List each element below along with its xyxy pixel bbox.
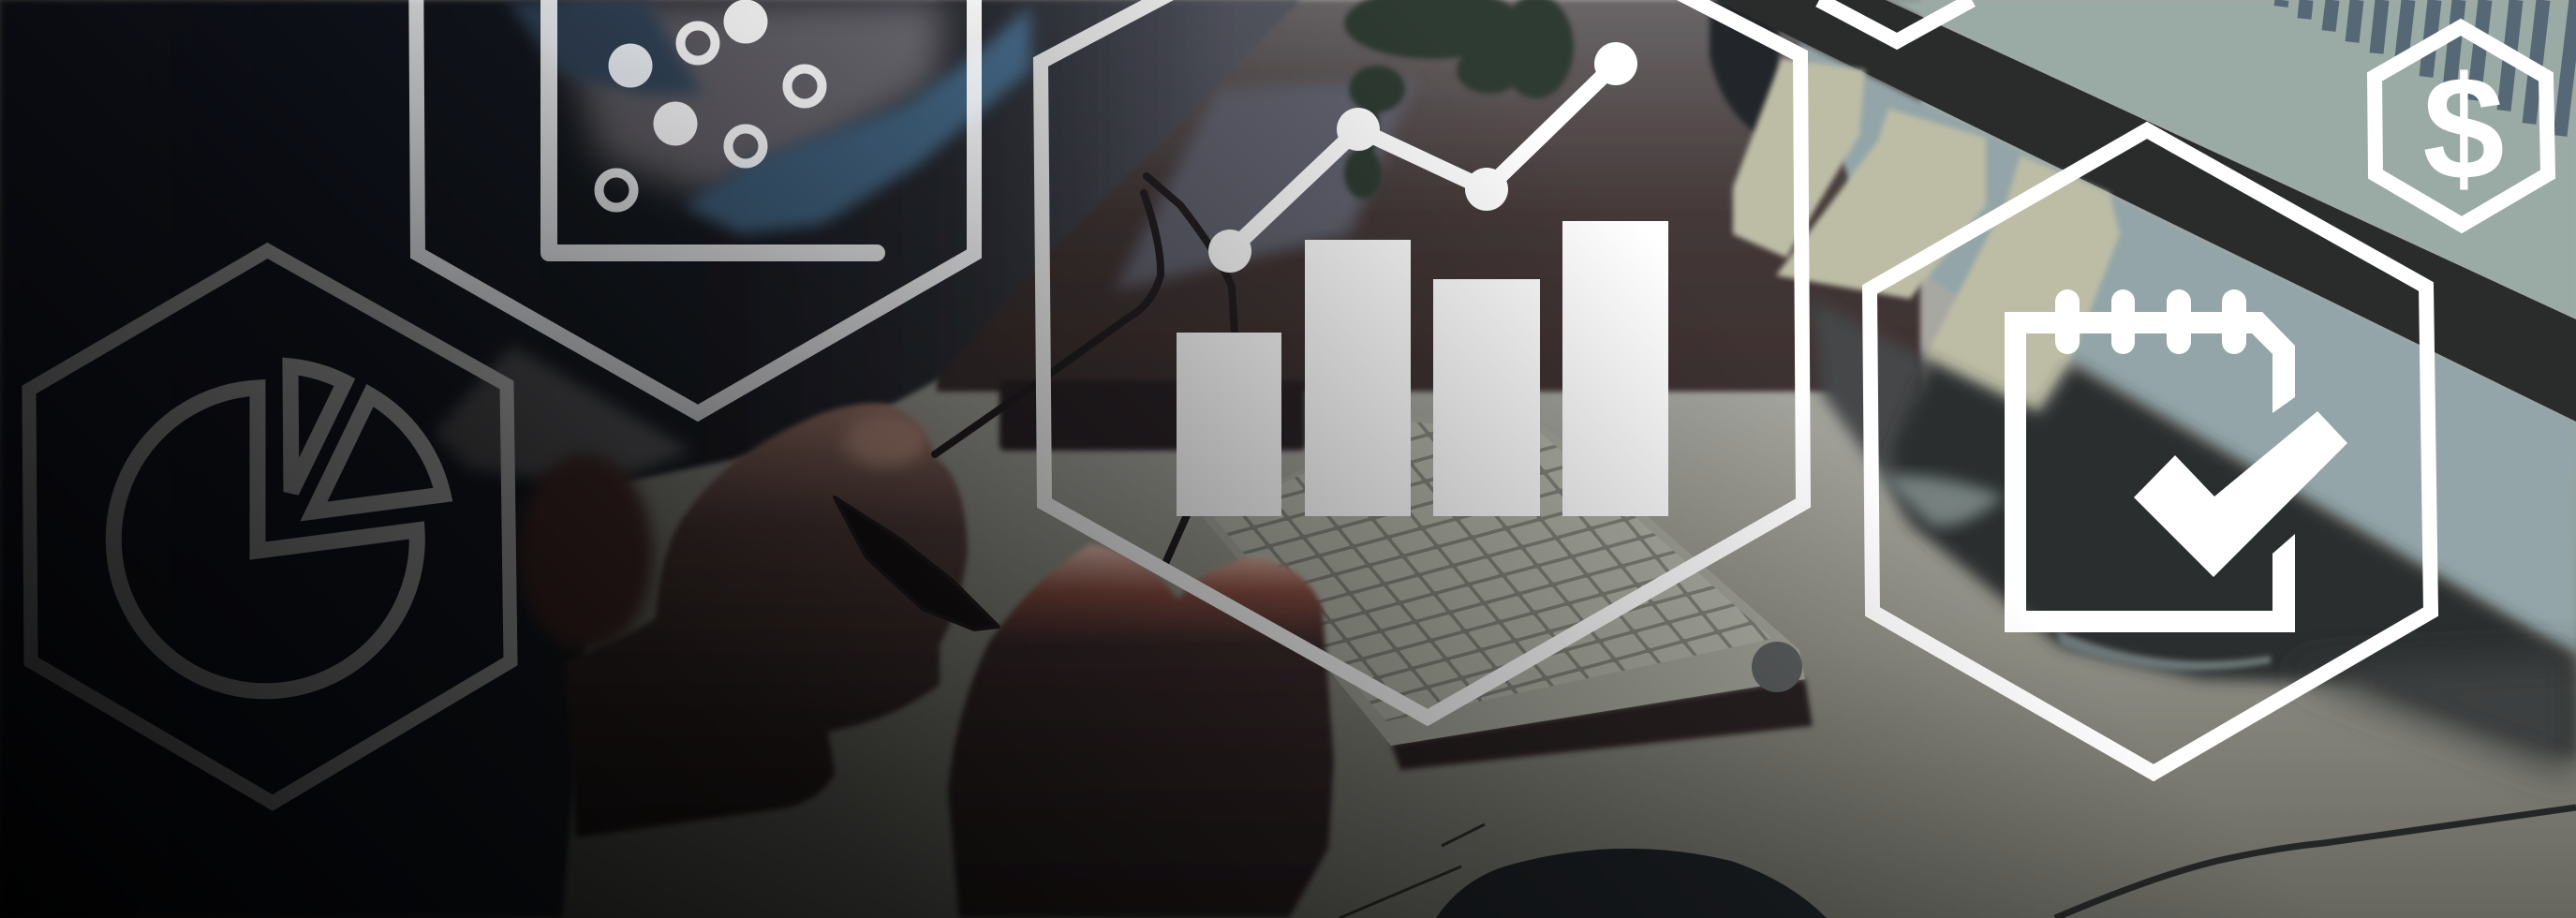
icon: trend line: [1208, 42, 1637, 273]
monitor back: [1886, 0, 2576, 319]
dark monitor shadow: [1892, 361, 2576, 759]
blue sleeve highlight: [684, 6, 1030, 234]
monitor back edge: [1710, 0, 1780, 145]
grey backdrop at top of scatter panel: [553, 0, 946, 197]
hexagon: dollar: [2375, 27, 2548, 225]
knuckle highlight: [843, 414, 927, 466]
icon: scatter axes: [549, 0, 877, 253]
icon: calendar rings: [2055, 289, 2246, 354]
hexagon: top partial: [1819, 0, 1972, 41]
pale panel below monitor bezel: [1799, 42, 2576, 656]
sticky notes: [1733, 58, 2120, 413]
mouse: [1436, 849, 1827, 918]
monitor vents: [2281, 0, 2576, 136]
right hand: [948, 544, 1334, 918]
paper triangle: [434, 346, 690, 487]
hexagon: calendar check: [1870, 130, 2431, 773]
icon: bars: [1177, 221, 1668, 516]
keyboard shadow: [1391, 679, 1813, 770]
dark sweater: [0, 0, 1300, 918]
dark object on desk: [999, 380, 1306, 451]
icon: check mark: [2134, 411, 2347, 577]
monitor bezel: [1716, 0, 2576, 422]
blue-grey wall wedge: [1115, 80, 1414, 290]
left hand: [565, 403, 968, 837]
dark wedge under notes: [1813, 300, 1930, 525]
glasses: [835, 176, 1235, 629]
icon: pie chart: [113, 366, 443, 691]
monitor stand: [1883, 476, 2005, 526]
hexagon: bar and line chart: [1041, 0, 1803, 718]
stand foot: [2056, 629, 2271, 671]
icon: ring points: [600, 26, 822, 208]
hexagon: pie chart: [29, 251, 511, 803]
icon: dollar sign: $: [2422, 47, 2505, 211]
hexagon: scatter plot: [416, 0, 974, 413]
back wall: [937, 0, 1920, 392]
lower shadow fade: [2286, 656, 2576, 777]
desk papers: [1340, 824, 1485, 918]
icon: solid points: [609, 0, 768, 146]
keyboard: [1204, 416, 1805, 746]
icon: calendar outline: [2005, 312, 2295, 632]
back hand: [518, 454, 653, 651]
cable: [2055, 807, 2576, 918]
plant: [1344, 0, 1574, 199]
blue fold highlight: [506, 0, 703, 94]
